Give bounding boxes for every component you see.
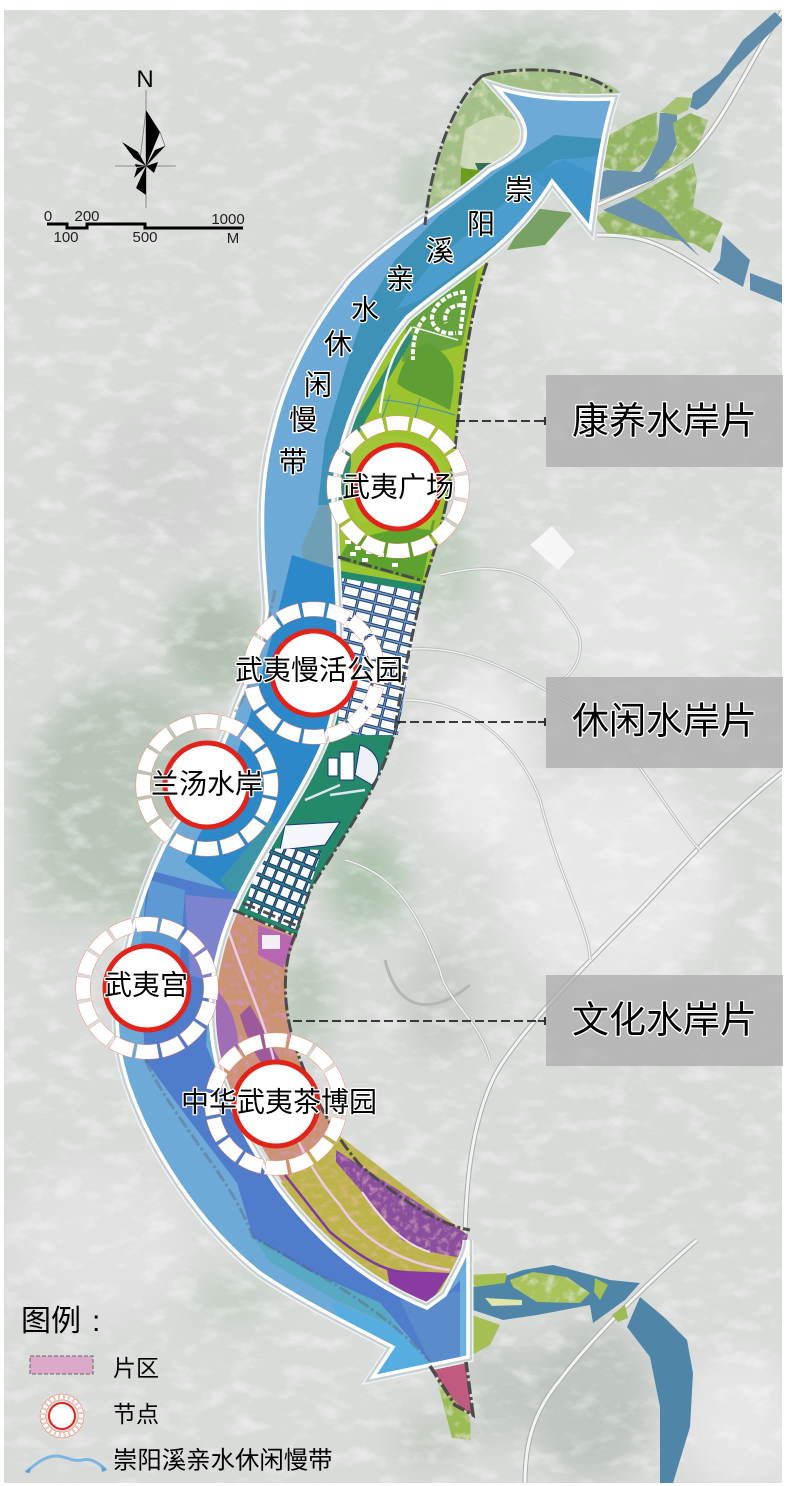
belt name: 水	[351, 294, 379, 326]
legend title: 图例	[21, 1305, 81, 1338]
zone: 文化水岸片	[212, 912, 468, 1308]
belt name: 阳	[467, 208, 495, 240]
zone: 康养水岸片	[333, 250, 500, 585]
legend: zone swatch: 片区	[113, 1355, 159, 1381]
leader lines	[293, 417, 545, 1025]
compass and wind rose	[115, 66, 176, 208]
legend: belt: 崇阳溪亲水休闲慢带	[113, 1448, 333, 1474]
zone: north hillside	[426, 68, 620, 250]
slow-living belt fill	[100, 70, 630, 1390]
legend: node: 节点	[113, 1401, 159, 1427]
slow-living belt outline	[117, 88, 613, 1377]
node: 武夷广场: 武夷广场	[342, 472, 454, 502]
belt name: 亲	[386, 264, 414, 294]
node: 中华武夷茶博园: 中华武夷茶博园	[181, 1086, 377, 1118]
zone: south tip	[430, 1362, 473, 1440]
scale bar: 0	[44, 208, 52, 225]
roads	[345, 10, 785, 1483]
node: 兰汤水岸	[143, 721, 271, 849]
legend: node	[43, 1397, 159, 1435]
legend: zone swatch	[30, 1355, 159, 1381]
compass and wind rose: N	[136, 66, 154, 93]
zone: 休闲水岸片	[233, 570, 425, 935]
belt name: 慢	[289, 404, 317, 436]
panel: 文化水岸片	[546, 975, 783, 1066]
node: 兰汤水岸: 兰汤水岸	[151, 768, 263, 800]
belt name: 休	[324, 328, 352, 360]
node: 武夷宫: 武夷宫	[104, 970, 188, 1000]
wetlands: south river	[470, 1265, 693, 1483]
panel: 康养水岸片: 康养水岸片	[572, 400, 757, 442]
node: 武夷广场	[334, 423, 462, 551]
belt name: 带	[279, 446, 307, 478]
node: 武夷慢活公园	[235, 609, 403, 737]
belt name: 闲	[304, 370, 332, 400]
belt name: 崇	[505, 174, 533, 206]
node: 武夷慢活公园: 武夷慢活公园	[235, 654, 403, 686]
zone boundary lines	[145, 70, 612, 1415]
wetlands: north-east river	[595, 12, 783, 303]
scale bar: 200	[74, 208, 100, 225]
panel: 康养水岸片	[546, 375, 783, 467]
panel: 休闲水岸片: 休闲水岸片	[572, 700, 757, 742]
legend title: :	[92, 1305, 100, 1338]
belt inner white edge	[117, 88, 613, 1377]
scale bar: 500	[132, 229, 158, 246]
panel: 休闲水岸片	[546, 677, 783, 768]
node: 中华武夷茶博园	[181, 1040, 377, 1168]
scale bar: 100	[53, 229, 79, 246]
scale bar	[44, 208, 245, 247]
panel: 文化水岸片: 文化水岸片	[572, 1000, 757, 1040]
scale bar: 1000	[211, 211, 245, 228]
belt name: 溪	[426, 236, 454, 266]
belt name	[279, 174, 533, 478]
scale bar: M	[227, 230, 239, 247]
node: 武夷宫	[83, 924, 211, 1052]
